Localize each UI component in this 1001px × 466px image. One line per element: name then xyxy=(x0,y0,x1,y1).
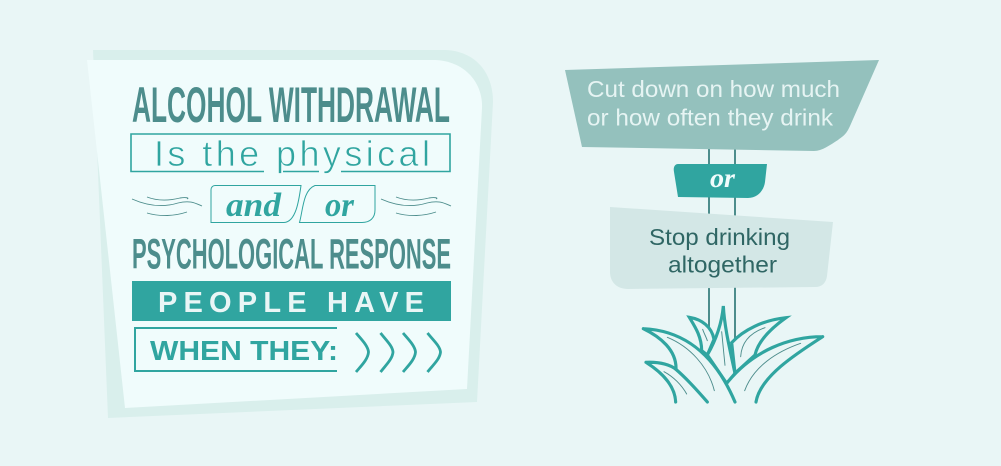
sign: cut down xyxy=(565,60,879,151)
badge: and xyxy=(211,186,301,224)
badge: and: and xyxy=(226,187,282,224)
sign: stop drinking: Stop drinking xyxy=(649,224,790,250)
badge: or connector xyxy=(674,163,767,198)
decoration: left squiggles xyxy=(132,197,202,216)
panel shadow xyxy=(93,50,493,418)
signpost illustration xyxy=(565,60,879,402)
heading: psychological response: PSYCHOLOGICAL RESPONSE xyxy=(132,230,451,278)
icon: plant xyxy=(643,306,823,402)
text box: is the physical: Is the physical xyxy=(154,133,430,174)
heading: alcohol withdrawal: ALCOHOL WITHDRAWAL xyxy=(132,77,450,133)
badge: or connector: or xyxy=(710,163,736,193)
panel front xyxy=(87,60,482,408)
plant veins xyxy=(664,328,801,394)
text box: when they xyxy=(135,328,338,371)
panel: definition card xyxy=(87,50,493,418)
text box: when they: WHEN THEY: xyxy=(150,335,338,366)
badge: or xyxy=(300,186,375,224)
sign: stop drinking xyxy=(610,207,833,289)
badge: or: or xyxy=(325,187,355,224)
sign: cut down: Cut down on how much xyxy=(587,76,840,102)
banner: people have xyxy=(132,281,451,321)
decoration: right squiggles xyxy=(381,197,451,216)
sign: cut down: or how often they drink xyxy=(587,104,834,130)
icon: chevron arrows xyxy=(356,333,440,372)
sign: stop drinking: altogether xyxy=(668,252,777,278)
signpost poles xyxy=(709,148,735,340)
banner: people have: PEOPLE HAVE xyxy=(158,287,424,319)
